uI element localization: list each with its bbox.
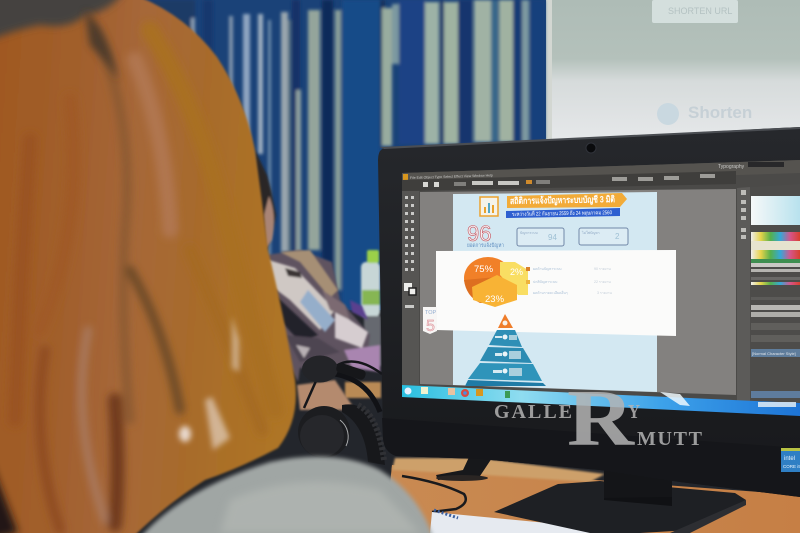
exploded pie chart xyxy=(464,257,528,307)
watermark: Gallery RMUTT xyxy=(494,375,703,463)
hair strands xyxy=(15,30,275,530)
patterned blouse xyxy=(260,250,380,382)
pie legend: ผลด้านรายละเอียดอื่นๆ xyxy=(533,290,568,295)
total reports figure: ยอดการแจ้งปัญหา xyxy=(467,242,504,249)
pale glimpses through hair xyxy=(179,316,239,450)
dark lower left xyxy=(0,460,18,533)
header banner xyxy=(506,193,627,218)
exploded pie chart: 2% xyxy=(510,267,523,277)
menu bar: Typography xyxy=(718,164,745,170)
desk far edge xyxy=(392,458,605,482)
Top 5 tag: TOP xyxy=(425,310,437,316)
header banner: ระหว่างวันที่ 22 กันยายน 2559 ถึง 24 พฤษภาคม 2560 xyxy=(512,208,612,218)
total reports figure: 96 xyxy=(467,221,491,246)
stat box 2: 2 xyxy=(615,232,620,241)
arm xyxy=(297,380,352,410)
white overlay band with pie chart xyxy=(436,250,676,336)
table edge behind headset xyxy=(345,382,381,398)
chart icon xyxy=(480,197,498,216)
stat box 2 xyxy=(579,228,628,245)
projection screen: SHORTEN URL xyxy=(668,6,732,16)
control bar xyxy=(402,171,736,191)
watermark: Gallery RMUTT: GALLE xyxy=(494,401,572,423)
artboard xyxy=(453,192,657,392)
neighbouring person's head xyxy=(255,150,276,250)
stat box 1 xyxy=(517,228,564,246)
watermark: Gallery RMUTT: Y xyxy=(628,401,640,423)
menu bar xyxy=(402,160,800,186)
Intel badge: intel xyxy=(784,456,795,462)
monitor xyxy=(378,127,800,497)
white paper with spiral notebook xyxy=(430,510,620,533)
monitor bezel xyxy=(378,127,800,497)
water bottle xyxy=(361,250,381,366)
monitor stand base xyxy=(494,466,746,533)
curtains xyxy=(125,0,546,310)
watermark: Gallery RMUTT: MUTT xyxy=(637,428,703,450)
stat box 1: 94 xyxy=(548,233,557,242)
pie legend: ปกติปัญหาระบบ xyxy=(533,280,557,284)
pyramid xyxy=(465,314,546,386)
stat box 1: ปัญหาระบบ xyxy=(520,231,538,235)
Top 5 tag: 5 xyxy=(426,318,435,335)
pie legend: 3 รายงาน xyxy=(597,291,612,295)
exploded pie chart: 75% xyxy=(474,264,494,275)
tools panel xyxy=(402,191,419,385)
desk xyxy=(385,465,800,533)
right panels: [Normal Character Style] xyxy=(752,351,796,356)
total reports figure xyxy=(467,221,504,249)
headset with microphone xyxy=(298,356,385,465)
screen: Illustrator window xyxy=(402,160,800,416)
header banner: สถิติการแจ้งปัญหาระบบบัญชี 3 มิติ xyxy=(510,194,615,207)
projection screen xyxy=(546,0,800,140)
projection screen: Shorten xyxy=(688,103,752,122)
pie legend: 90 รายงาน xyxy=(594,267,611,271)
menu bar: File Edit Object Type Select Effect View Window Help xyxy=(410,173,493,180)
watermark: Gallery RMUTT: R xyxy=(567,375,635,463)
grey crown of hair xyxy=(0,0,125,40)
Top 5 tag xyxy=(423,307,437,335)
pie legend: ผลด้านปัญหาระบบ xyxy=(533,267,562,271)
webcam xyxy=(586,143,596,153)
Intel badge xyxy=(781,448,800,472)
exploded pie chart: 23% xyxy=(485,294,505,305)
grey sweater xyxy=(138,457,434,533)
small black stand and cable xyxy=(402,455,492,512)
right panels xyxy=(737,184,800,415)
pie legend: 22 รายงาน xyxy=(594,280,611,284)
person's hair, seen from behind xyxy=(0,0,296,533)
canvas xyxy=(420,189,736,395)
taskbar xyxy=(402,385,800,416)
stat box 2: ไม่ใช่ปัญหา xyxy=(581,230,600,235)
pie legend xyxy=(526,267,612,295)
